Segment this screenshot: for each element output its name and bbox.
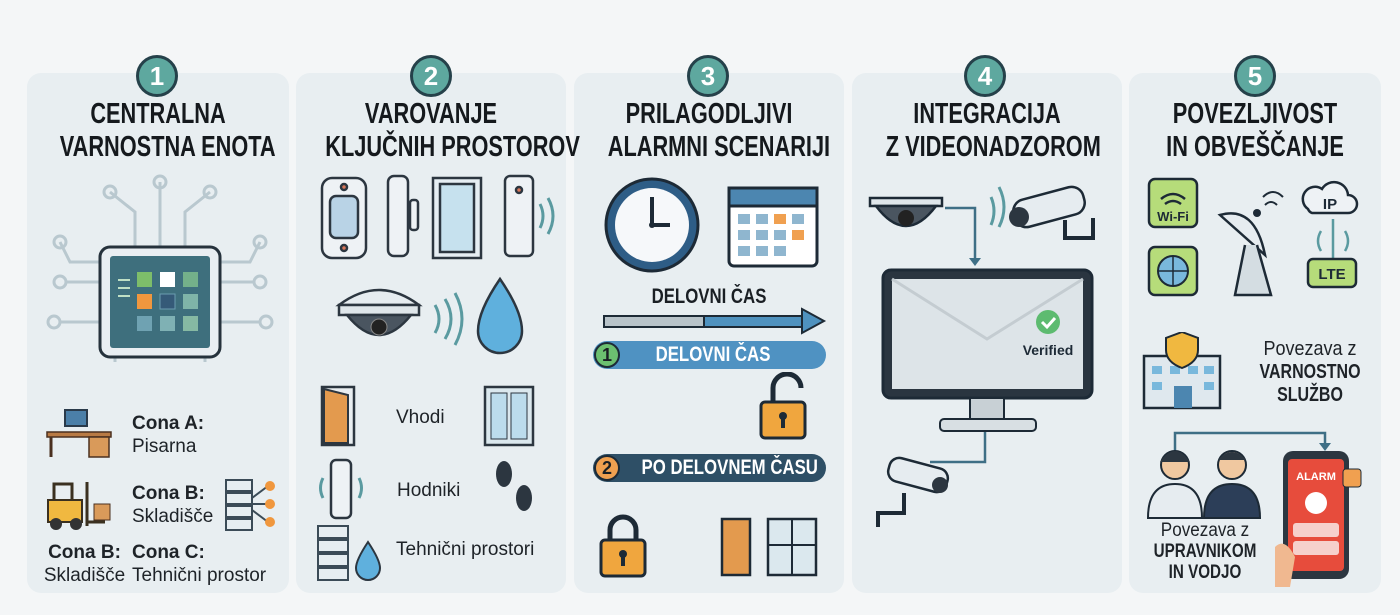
icons: sensors row bbox=[320, 174, 554, 260]
panel: 4 bbox=[852, 73, 1122, 593]
title 4: INTEGRACIJA bbox=[913, 98, 1061, 130]
arrows to monitor bbox=[930, 206, 986, 464]
item: Hodniki bbox=[319, 458, 532, 520]
zone labels bottom: Skladišče bbox=[44, 565, 125, 586]
badge 1: 1 bbox=[150, 61, 164, 91]
icon: monitor verified: Verified bbox=[1023, 342, 1073, 358]
text: upravnik in vodja: IN VODJO bbox=[1169, 562, 1241, 583]
item: Vhodi: Vhodi bbox=[396, 407, 445, 428]
timeline arrow bbox=[603, 307, 826, 335]
zone B: forklift + servers bbox=[47, 479, 275, 531]
zone A: desk icon and text bbox=[46, 409, 204, 458]
icons: connectivity (wifi, globe, satellite, IP, LTE): Wi-Fi bbox=[1157, 209, 1189, 224]
title 1: CENTRALNA bbox=[90, 98, 226, 130]
security service link: Povezava z bbox=[1263, 338, 1357, 360]
item: Hodniki: Hodniki bbox=[397, 480, 460, 501]
title 1 bbox=[60, 98, 276, 163]
text: upravnik in vodja: Povezava z bbox=[1161, 520, 1249, 541]
icon: calendar bbox=[728, 186, 818, 268]
panel: 5 bbox=[1129, 73, 1381, 593]
item: Tehnični prostori bbox=[317, 525, 534, 581]
title 2: VAROVANJE bbox=[365, 98, 497, 130]
icons: connectivity (wifi, globe, satellite, IP, LTE): LTE bbox=[1318, 266, 1346, 283]
icons: connectivity (wifi, globe, satellite, IP, LTE) bbox=[1148, 178, 1358, 296]
title 5 bbox=[1166, 98, 1344, 163]
bar 1: delovni cas bbox=[593, 341, 826, 369]
badge 3: 3 bbox=[701, 61, 715, 91]
panel: 1 bbox=[27, 73, 289, 593]
icon: clock bbox=[604, 178, 700, 272]
icon: closed padlock bbox=[600, 514, 646, 578]
bar 1: delovni cas: 1 bbox=[602, 345, 612, 365]
zone C label bbox=[132, 542, 266, 586]
item: Tehnični prostori: Tehnični prostori bbox=[396, 539, 534, 560]
security service link: SLUŽBO bbox=[1277, 384, 1343, 406]
icon: door and window bbox=[720, 518, 818, 576]
icon: phone alarm: ALARM bbox=[1296, 471, 1336, 483]
bar 2: po delovnem casu bbox=[593, 454, 826, 482]
badge 5 bbox=[1234, 55, 1276, 97]
zone C label: Cona C: bbox=[132, 542, 205, 563]
badge 2 bbox=[410, 55, 452, 97]
icon: bullet camera bottom bbox=[876, 456, 950, 527]
icon: managers bbox=[1147, 450, 1261, 519]
badge 1 bbox=[136, 55, 178, 97]
bar 1: delovni cas: DELOVNI ČAS bbox=[656, 343, 770, 366]
title 2 bbox=[325, 98, 580, 163]
icon: control panel with circuits bbox=[46, 174, 274, 362]
bar 2: po delovnem casu: 2 bbox=[602, 458, 612, 478]
panel: 3 bbox=[574, 73, 844, 593]
title 5: POVEZLJIVOST bbox=[1173, 98, 1337, 130]
title 1: VARNOSTNA ENOTA bbox=[60, 131, 276, 163]
panel: 2 bbox=[296, 73, 566, 593]
zone B: forklift + servers: Skladišče bbox=[132, 506, 213, 527]
title 3: ALARMNI SCENARIJI bbox=[608, 131, 830, 163]
zone labels bottom bbox=[44, 542, 125, 586]
zone A: desk icon and text: Pisarna bbox=[132, 436, 196, 457]
zone B: forklift + servers: Cona B: bbox=[132, 483, 205, 504]
icon: open padlock bbox=[760, 372, 806, 440]
text: upravnik in vodja bbox=[1154, 520, 1256, 583]
badge 3 bbox=[687, 55, 729, 97]
security service link bbox=[1142, 332, 1361, 410]
title 2: KLJUČNIH PROSTOROV bbox=[325, 131, 580, 163]
security service link: VARNOSTNO bbox=[1259, 361, 1361, 383]
icon: dome camera 4 bbox=[868, 196, 944, 228]
title 3: PRILAGODLJIVI bbox=[626, 98, 792, 130]
zone A: desk icon and text: Cona A: bbox=[132, 413, 204, 434]
title 4 bbox=[886, 98, 1101, 163]
icon: phone alarm bbox=[1275, 451, 1362, 587]
item: Vhodi bbox=[320, 386, 534, 446]
title 5: IN OBVEŠČANJE bbox=[1166, 131, 1344, 163]
badge 5: 5 bbox=[1248, 61, 1262, 91]
badge 4 bbox=[964, 55, 1006, 97]
arrow to phone bbox=[1174, 432, 1331, 451]
icons: connectivity (wifi, globe, satellite, IP, LTE): IP bbox=[1323, 196, 1337, 213]
title 3 bbox=[608, 98, 830, 163]
icon: bullet camera top bbox=[990, 186, 1095, 240]
title 4: Z VIDEONADZOROM bbox=[886, 131, 1101, 163]
text: upravnik in vodja: UPRAVNIKOM bbox=[1154, 541, 1256, 562]
badge 4: 4 bbox=[978, 61, 992, 91]
bar 2: po delovnem casu: PO DELOVNEM ČASU bbox=[642, 456, 818, 479]
icons: dome camera + water drop bbox=[335, 276, 524, 354]
zone labels bottom: Cona B: bbox=[48, 542, 121, 563]
badge 2: 2 bbox=[424, 61, 438, 91]
label: delovni cas: DELOVNI ČAS bbox=[652, 285, 766, 308]
zone C label: Tehnični prostor bbox=[132, 565, 266, 586]
icon: monitor verified bbox=[882, 268, 1094, 432]
